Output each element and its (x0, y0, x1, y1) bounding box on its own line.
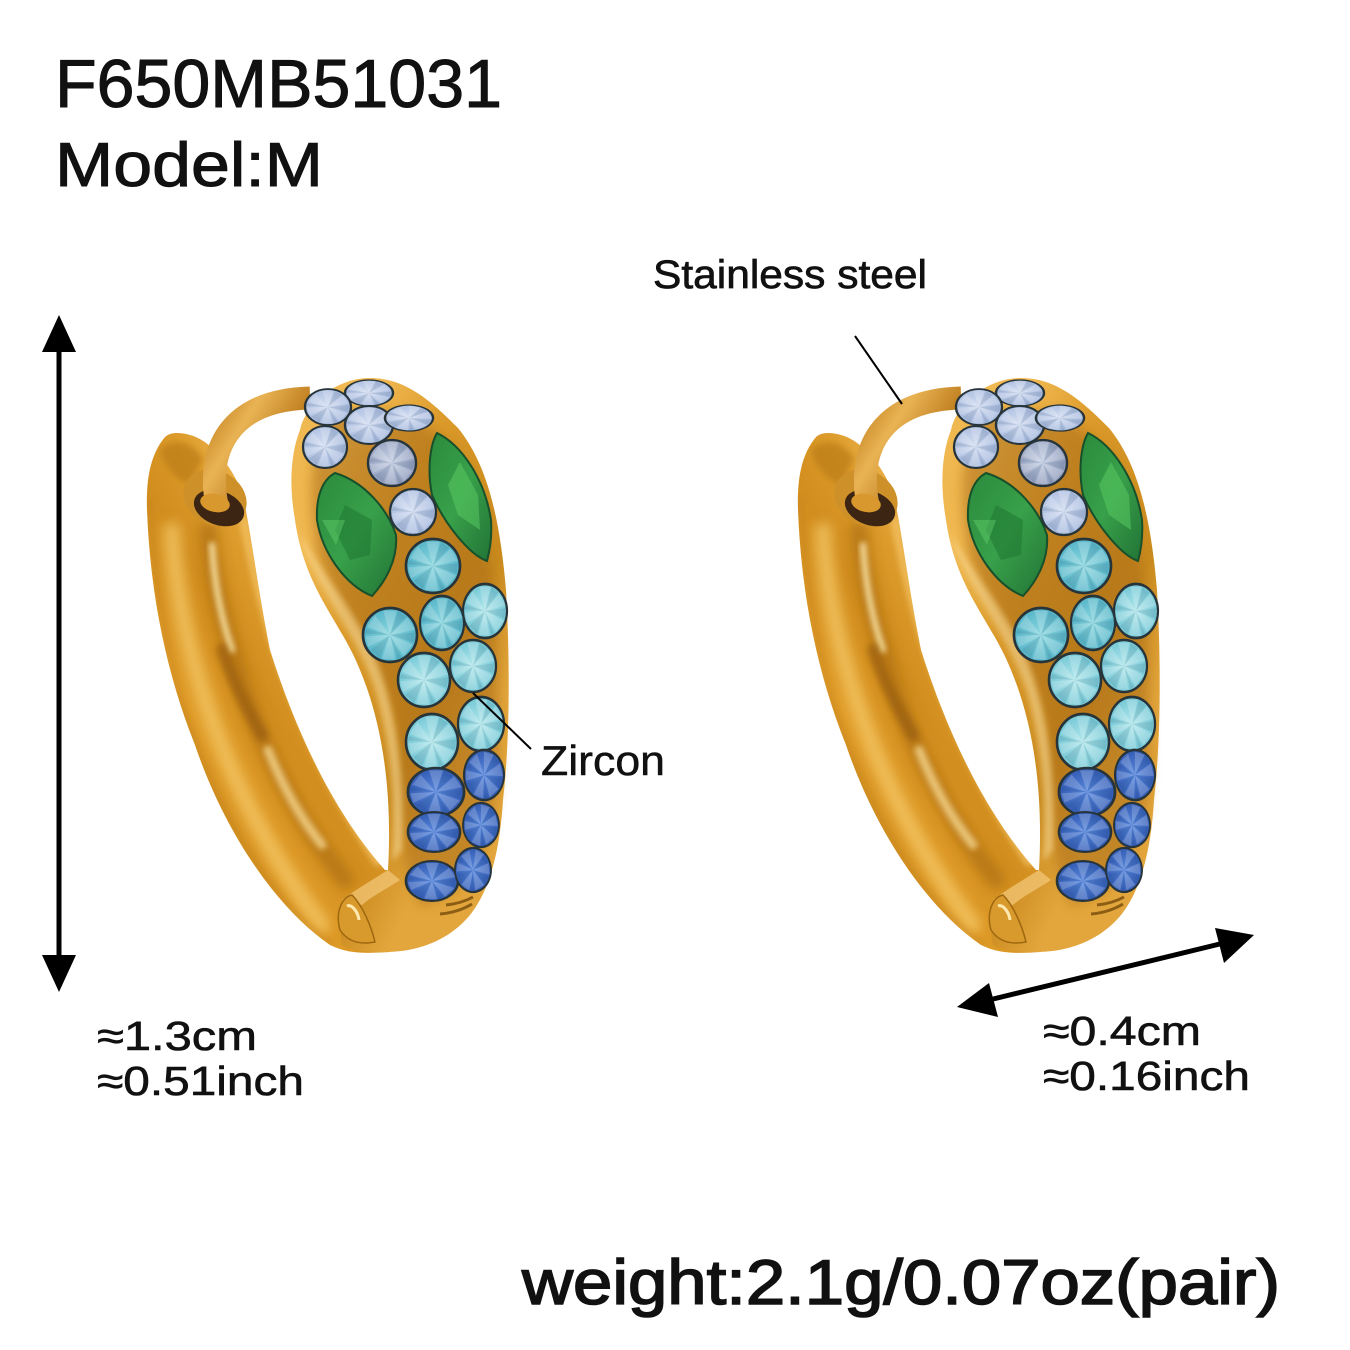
blue zircon stones (406, 744, 508, 901)
back band (147, 433, 400, 953)
periwinkle zircon stones (303, 380, 438, 535)
body shading (298, 530, 403, 862)
green marquise stones (317, 433, 491, 596)
green facets (322, 462, 480, 560)
width arrow (957, 928, 1254, 1017)
height dimension: ≈0.51inch (97, 1058, 304, 1104)
body slots (440, 897, 473, 914)
earring: left, front view (147, 378, 509, 953)
weight: weight:2.1g/0.07oz(pair) (521, 1248, 1280, 1318)
title: product code: F650MB51031 (55, 46, 502, 122)
width dimension (1043, 1008, 1250, 1099)
label: zircon: Zircon (541, 737, 665, 784)
snake head body (291, 378, 509, 952)
hinge socket (173, 458, 257, 538)
width dimension: ≈0.16inch (1043, 1053, 1250, 1099)
band highlights (150, 500, 378, 943)
leader line: zircon (473, 693, 531, 749)
hinge pin collar (198, 491, 232, 515)
subtitle: model: Model:M (55, 131, 323, 200)
leader line: stainless steel (855, 336, 902, 404)
height dimension: ≈1.3cm (97, 1013, 257, 1059)
label: stainless steel: Stainless steel (653, 253, 927, 297)
hinge pin (214, 398, 310, 505)
stone bed shading (311, 410, 498, 905)
earring: right, angled view (798, 378, 1160, 953)
hinge cap and seam (338, 870, 400, 943)
band top ridge (160, 442, 203, 485)
height dimension (97, 1013, 304, 1104)
height arrow (42, 315, 76, 992)
teal zircon stones (363, 539, 507, 770)
width dimension: ≈0.4cm (1043, 1008, 1201, 1054)
